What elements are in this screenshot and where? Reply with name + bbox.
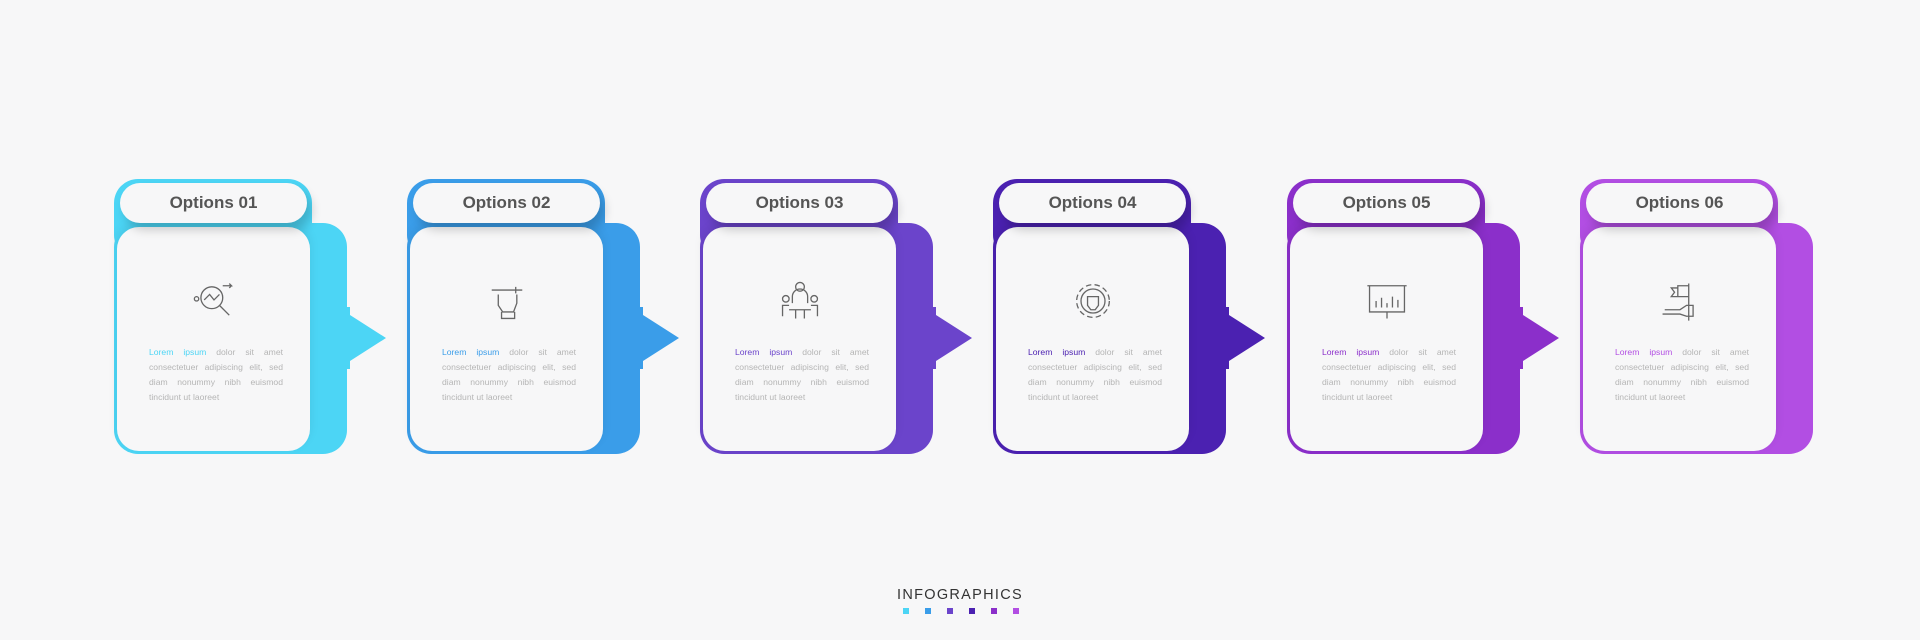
header pill: Options 06: [1636, 193, 1723, 212]
text block: consectetuer adipiscing elit, sed: [1322, 362, 1456, 372]
text block: diam nonummy nibh euismod: [735, 377, 869, 387]
icon: gear fist: [1076, 284, 1110, 318]
text block: tincidunt ut laoreet: [1615, 392, 1685, 402]
text block: Lorem ipsum dolor sit amet: [442, 347, 576, 357]
icon: presentation board: [1367, 285, 1407, 318]
header pill: [1586, 183, 1773, 223]
text block: Lorem ipsum dolor sit amet: [1322, 347, 1456, 357]
arrow: [1520, 307, 1559, 369]
card: Options 03: [700, 179, 972, 454]
header pill: Options 03: [756, 193, 843, 212]
text block: Lorem ipsum dolor sit amet: [149, 347, 283, 357]
icon: hand with flag: [1662, 284, 1694, 321]
arrow: [1226, 307, 1265, 369]
header pill: [413, 183, 600, 223]
text block: consectetuer adipiscing elit, sed: [149, 362, 283, 372]
icon: hand with pen: [492, 286, 522, 320]
header pill: [120, 183, 307, 223]
card: Options 02: [407, 179, 679, 454]
text block: diam nonummy nibh euismod: [442, 377, 576, 387]
text block: consectetuer adipiscing elit, sed: [442, 362, 576, 372]
legend squares: [903, 608, 1019, 614]
text block: consectetuer adipiscing elit, sed: [735, 362, 869, 372]
icon: meeting: [782, 282, 818, 318]
header pill: Options 02: [463, 193, 550, 212]
text block: consectetuer adipiscing elit, sed: [1615, 362, 1749, 372]
header pill: [999, 183, 1186, 223]
header pill: [706, 183, 893, 223]
text block: consectetuer adipiscing elit, sed: [1028, 362, 1162, 372]
text block: [1322, 347, 1456, 402]
header pill: [1293, 183, 1480, 223]
text block: tincidunt ut laoreet: [735, 392, 805, 402]
text block: tincidunt ut laoreet: [1028, 392, 1098, 402]
text block: Lorem ipsum dolor sit amet: [735, 347, 869, 357]
text block: tincidunt ut laoreet: [1322, 392, 1392, 402]
text block: diam nonummy nibh euismod: [1028, 377, 1162, 387]
text block: [442, 347, 576, 402]
text block: tincidunt ut laoreet: [442, 392, 512, 402]
text block: [1028, 347, 1162, 402]
header pill: Options 01: [170, 193, 257, 212]
text block: diam nonummy nibh euismod: [1615, 377, 1749, 387]
arrow: [640, 307, 679, 369]
header pill: Options 05: [1343, 193, 1430, 212]
text block: [735, 347, 869, 402]
card: Options 01: [114, 179, 386, 454]
text block: diam nonummy nibh euismod: [1322, 377, 1456, 387]
arrow: [347, 307, 386, 369]
arrow: [933, 307, 972, 369]
text block: Lorem ipsum dolor sit amet: [1615, 347, 1749, 357]
footer title: INFOGRAPHICS: [897, 587, 1023, 603]
header pill: Options 04: [1049, 193, 1136, 212]
text block: Lorem ipsum dolor sit amet: [1028, 347, 1162, 357]
card: Options 05: [1287, 179, 1559, 454]
text block: [1615, 347, 1749, 402]
icon: magnifier chart: [194, 283, 233, 316]
text block: [149, 347, 283, 402]
card: Options 06: [1580, 179, 1813, 454]
text block: tincidunt ut laoreet: [149, 392, 219, 402]
card: Options 04: [993, 179, 1265, 454]
text block: diam nonummy nibh euismod: [149, 377, 283, 387]
